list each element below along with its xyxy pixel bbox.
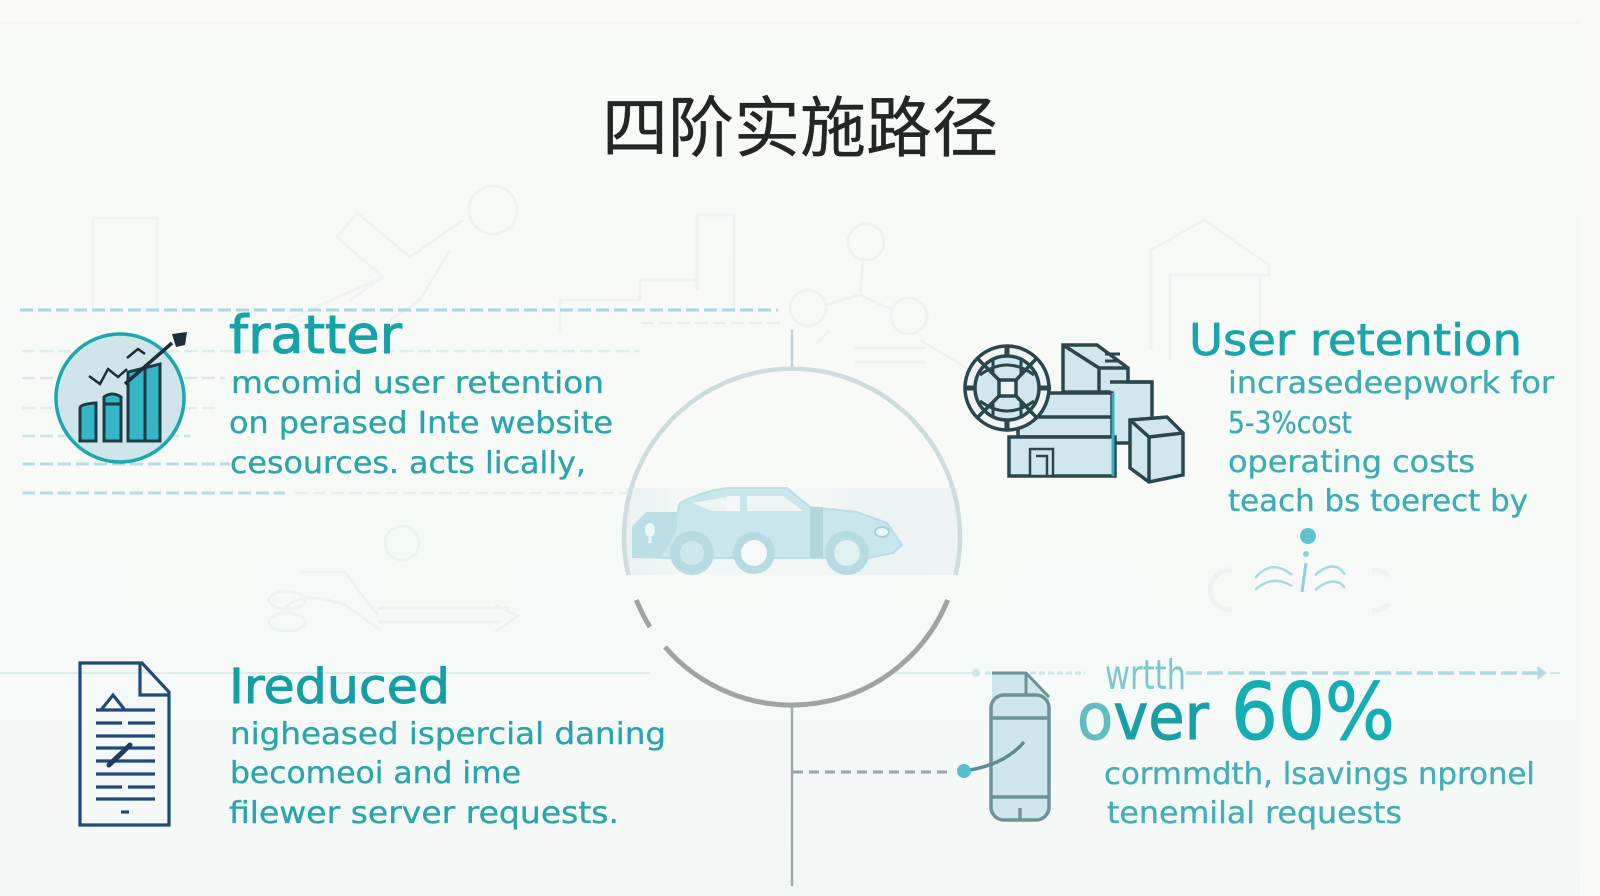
central vertical axis <box>791 330 793 886</box>
icon: rising bar chart <box>56 332 187 462</box>
heading: user retention: User retention <box>1189 315 1522 366</box>
horizontal guide line with arrow <box>0 667 1560 679</box>
body text: tenemilal requests <box>1107 796 1402 831</box>
body text: mcomid user retention <box>231 366 604 401</box>
heading: 60%: 60% <box>1231 668 1395 758</box>
body text: filewer server requests. <box>229 796 619 831</box>
small label: wrtth <box>1105 651 1186 699</box>
block: bottom right <box>793 651 1535 831</box>
body text <box>1104 757 1535 831</box>
body text: becomeoi and ime <box>230 756 521 791</box>
body text: operating costs <box>1228 445 1475 480</box>
car backdrop <box>626 488 958 575</box>
icon: faded signal mark <box>1210 528 1388 610</box>
dashed guide lines: upper left <box>20 310 780 493</box>
block: bottom left <box>80 659 666 831</box>
body text: cesources. acts lically, <box>230 446 586 481</box>
icon: document <box>80 663 169 825</box>
body text: cormmdth, lsavings npronel <box>1104 757 1535 792</box>
body text: incrasedeepwork for <box>1228 366 1555 401</box>
icon: factory with gear <box>965 345 1183 482</box>
block: top left <box>56 305 613 481</box>
car illustration <box>633 488 902 575</box>
body text <box>229 717 666 831</box>
heading: over: over <box>1077 681 1210 755</box>
heading: reduced: Ireduced <box>229 659 450 715</box>
body text <box>229 366 613 481</box>
faint background icons <box>93 186 1269 632</box>
block: top right <box>965 315 1555 610</box>
body text: on perased Inte website <box>229 406 613 441</box>
body text: teach bs toerect by <box>1228 484 1528 519</box>
heading: fratter: fratter <box>229 305 402 366</box>
car panel with ring <box>624 369 960 705</box>
ring lower arc <box>636 600 948 705</box>
body text: nigheased ispercial daning <box>230 717 666 752</box>
body text <box>1228 366 1555 519</box>
icon: phone file <box>957 673 1049 820</box>
ring upper arc <box>624 369 960 575</box>
dashed connector <box>793 770 953 774</box>
title: 四阶实施路径 <box>602 75 998 171</box>
body text: 5-3%cost <box>1228 406 1352 441</box>
